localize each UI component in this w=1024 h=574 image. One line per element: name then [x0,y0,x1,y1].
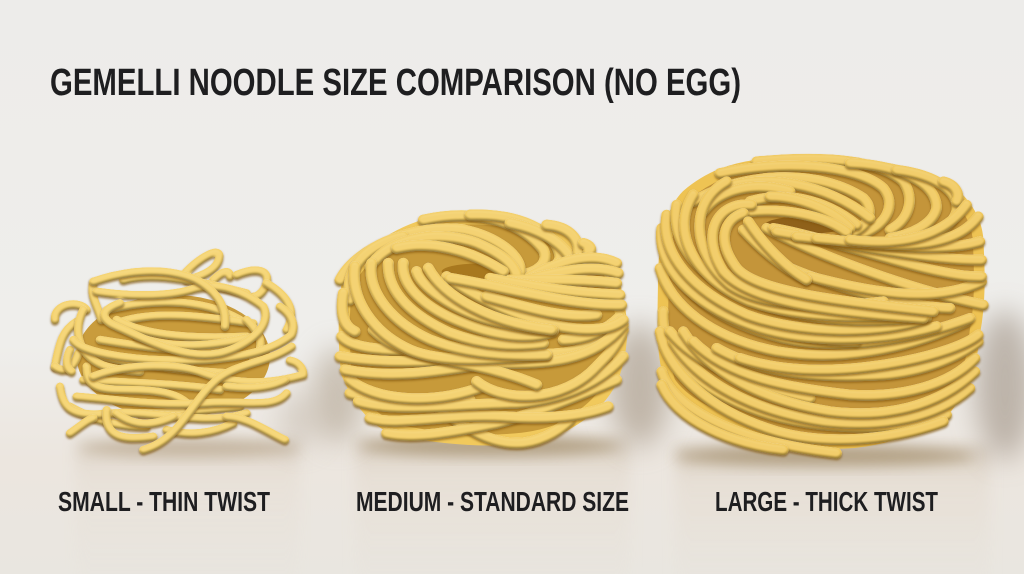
label: large: LARGE - THICK TWIST [715,486,938,517]
medium gemelli nest [340,215,623,443]
title: GEMELLI NOODLE SIZE COMPARISON (NO EGG) [50,62,741,104]
label: medium: MEDIUM - STANDARD SIZE [356,486,629,517]
label: small: SMALL - THIN TWIST [58,486,270,517]
small gemelli nest [55,253,303,450]
large gemelli nest [660,159,983,453]
